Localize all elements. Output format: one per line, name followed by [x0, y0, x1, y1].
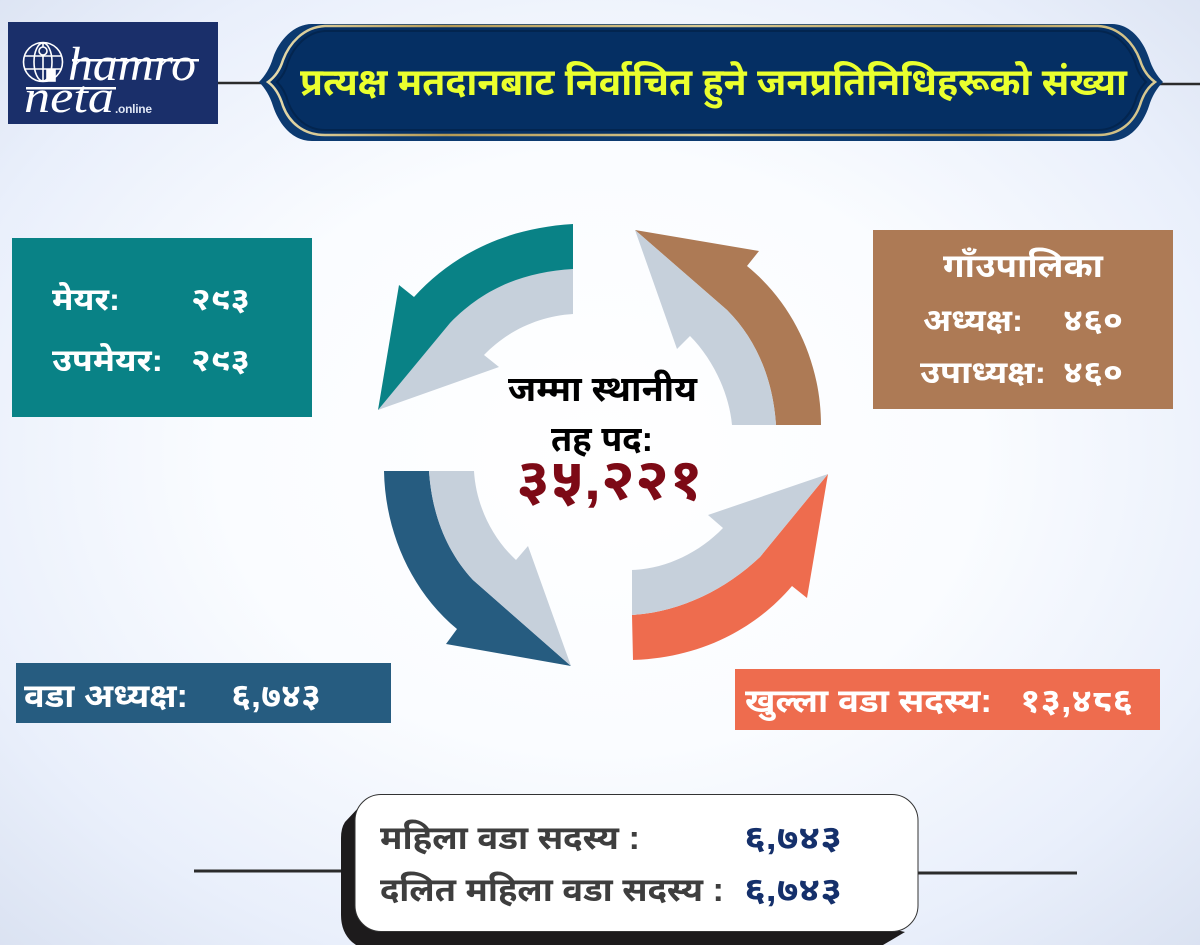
panel: rural municipality: उपाध्यक्ष:	[920, 355, 1046, 390]
title banner	[259, 24, 1163, 141]
connector lines beside title banner	[218, 83, 1200, 84]
connector lines beside bottom panel	[194, 871, 1077, 873]
arrow: brown	[635, 230, 821, 425]
panel: mayor	[12, 238, 312, 417]
arrow: teal	[378, 224, 573, 410]
panel: mayor: २९३	[191, 282, 250, 317]
panel: rural municipality: अध्यक्ष:	[923, 303, 1023, 338]
panel: ward chair: ६,७४३	[231, 677, 321, 714]
logo wordmark	[24, 38, 199, 122]
arrow: blue	[384, 471, 571, 666]
panel: rural municipality: गाँउपालिका	[943, 246, 1104, 284]
center total: जम्मा स्थानीय	[508, 369, 698, 409]
panel: mayor: मेयर:	[52, 282, 120, 317]
panel: open ward member: १३,४८६	[1020, 682, 1133, 719]
panel: women ward members: ६,७४३	[744, 871, 842, 908]
logo wordmark: hamro	[68, 38, 196, 91]
panel: open ward member: खुल्ला वडा सदस्य:	[745, 682, 992, 722]
cycle diagram	[378, 224, 828, 666]
panel: women ward members: महिला वडा सदस्य :	[380, 819, 640, 856]
panel: women ward members: ६,७४३	[744, 819, 842, 856]
logo wordmark: neta	[24, 71, 114, 122]
panel: open ward member	[735, 669, 1160, 730]
panel: women ward members	[341, 794, 918, 945]
logo: Hamro Neta	[8, 22, 218, 124]
center total: ३५,२२१	[516, 448, 703, 512]
panel: mayor: उपमेयर:	[52, 343, 163, 378]
panel: ward chair	[16, 663, 391, 723]
icon: globe	[24, 42, 62, 82]
panel: ward chair: वडा अध्यक्ष:	[24, 677, 188, 714]
arrow: orange	[632, 474, 828, 660]
panel: rural municipality: ४६०	[1063, 355, 1123, 390]
title text: प्रत्यक्ष मतदानबाट निर्वाचित हुने जनप्रतिनिधिहरूको संख्या	[300, 60, 1128, 109]
center total: तह पद:	[551, 420, 653, 459]
panel: rural municipality	[873, 230, 1173, 409]
logo wordmark: .online	[115, 102, 152, 116]
panel: rural municipality: ४६०	[1063, 303, 1123, 338]
panel: mayor: २९३	[191, 343, 250, 378]
panel: women ward members: दलित महिला वडा सदस्य :	[380, 871, 724, 908]
center total	[508, 369, 703, 512]
